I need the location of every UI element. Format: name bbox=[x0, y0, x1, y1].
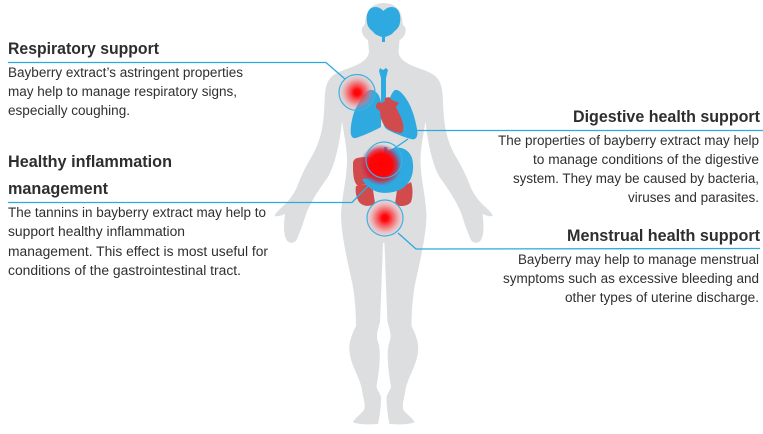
human body silhouette bbox=[275, 3, 493, 424]
text block: menstrual health support bbox=[503, 227, 760, 305]
text block: respiratory support: may help to manage respiratory signs, bbox=[8, 84, 237, 99]
red highlight: menstrual bbox=[367, 200, 403, 236]
text block: digestive health support: to manage conditions of the digestive bbox=[533, 152, 759, 167]
trachea bbox=[379, 68, 388, 103]
stomach bbox=[362, 147, 413, 193]
text block: healthy inflammation management: conditions of the gastrointestinal tract. bbox=[8, 263, 241, 278]
text block: respiratory support bbox=[8, 40, 243, 118]
left lung bbox=[351, 90, 381, 138]
heart bbox=[376, 97, 403, 133]
text block: healthy inflammation management: The tannins in bayberry extract may help to bbox=[8, 205, 266, 220]
organs bbox=[351, 7, 417, 206]
heading: healthy inflammation management: Healthy inflammation bbox=[8, 153, 172, 171]
text block: healthy inflammation management: support healthy inflammation bbox=[8, 224, 185, 239]
brain bbox=[367, 7, 400, 42]
text block: menstrual health support: symptoms such as excessive bleeding and bbox=[503, 271, 759, 286]
text block: respiratory support: Bayberry extract’s astringent properties bbox=[8, 65, 243, 80]
red highlight: respiratory bbox=[339, 74, 375, 110]
right lung bbox=[383, 90, 417, 139]
text block: respiratory support: especially coughing. bbox=[8, 103, 130, 118]
text block: digestive health support: system. They may be caused by bacteria, bbox=[513, 171, 759, 186]
text block: digestive health support: viruses and parasites. bbox=[628, 190, 759, 205]
red highlight: digestive bbox=[360, 142, 402, 186]
text block: menstrual health support: Bayberry may help to manage menstrual bbox=[518, 252, 759, 267]
heading: healthy inflammation management: management bbox=[8, 180, 108, 198]
connector lines bbox=[8, 62, 763, 249]
heading: healthy inflammation management bbox=[8, 153, 172, 198]
right intestine bbox=[395, 182, 412, 206]
liver bbox=[353, 157, 387, 186]
text block: digestive health support bbox=[498, 108, 760, 205]
text block: menstrual health support: other types of uterine discharge. bbox=[565, 290, 759, 305]
text block: digestive health support: The properties of bayberry extract may help bbox=[498, 133, 759, 148]
text block: healthy inflammation management bbox=[8, 153, 269, 278]
text block: healthy inflammation management: management. This effect is most useful for bbox=[8, 244, 269, 259]
heading: respiratory support: Respiratory support bbox=[8, 40, 159, 58]
heading: menstrual health support: Menstrual health support bbox=[567, 227, 760, 245]
heading: digestive health support: Digestive health support bbox=[573, 108, 760, 126]
left intestine bbox=[356, 184, 375, 206]
